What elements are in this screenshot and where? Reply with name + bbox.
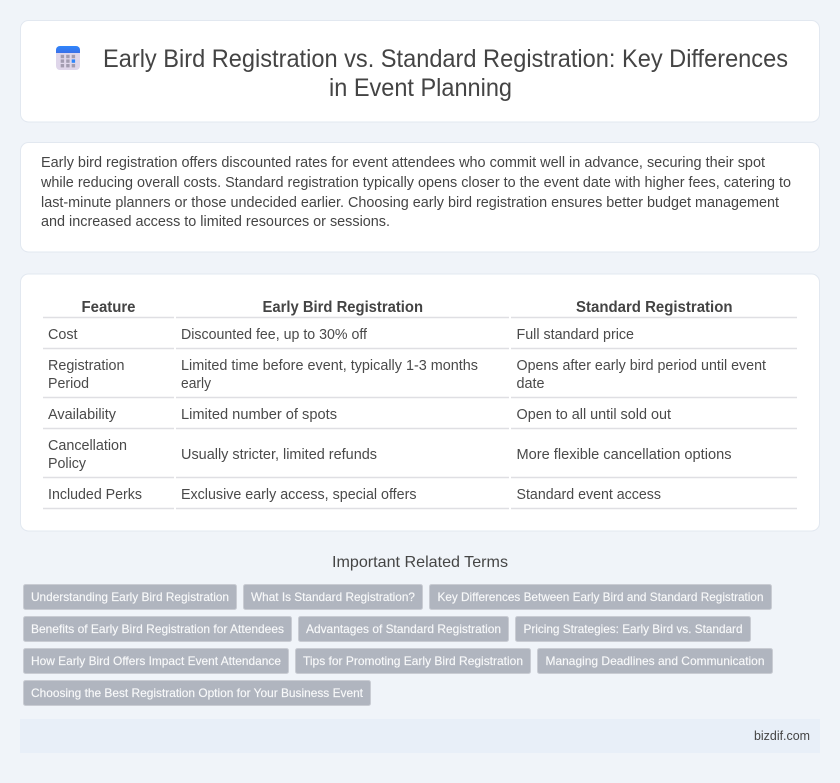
table header row: Early Bird Registration: [262, 299, 423, 316]
tag: [298, 616, 508, 642]
text block: introduction paragraph: [40, 155, 791, 230]
tag: Benefits of Early Bird Registration for Attendees: [31, 622, 284, 636]
tag: [24, 616, 292, 642]
table row: availability: Limited number of spots: [181, 407, 337, 423]
table row: cancellation policy: Cancellation: [48, 438, 127, 454]
tag: [244, 584, 422, 610]
text block: introduction paragraph: and increased access to limited resources or sessions.: [41, 214, 390, 230]
title: [103, 45, 788, 102]
table row: registration period: date: [516, 376, 544, 392]
title: Early Bird Registration vs. Standard Registration: Key Differences: [103, 45, 788, 73]
tag: [24, 648, 288, 674]
tag: How Early Bird Offers Impact Event Attendance: [31, 654, 281, 668]
text block: introduction paragraph: Early bird registration offers discounted rates for event attendees who commit well in advance, securing their spot: [41, 155, 765, 171]
tag: Managing Deadlines and Communication: [546, 654, 764, 668]
tag: [430, 584, 772, 610]
panel: introduction: [20, 142, 820, 252]
tag: Key Differences Between Early Bird and Standard Registration: [438, 590, 764, 604]
table header row: [82, 299, 732, 316]
text block: introduction paragraph: while reducing overall costs. Standard registration typically opens closer to the event date with higher fees, catering to: [40, 175, 791, 191]
tag: [296, 648, 530, 674]
table row: registration period: Limited time before event, typically 1-3 months: [181, 358, 478, 374]
table row: cancellation policy: More flexible cancellation options: [516, 447, 732, 463]
table row: cost: [48, 327, 634, 343]
table row: included perks: Standard event access: [516, 487, 661, 503]
table row: included perks: Included Perks: [48, 487, 142, 503]
panel: comparison table: [20, 274, 820, 531]
tag: Understanding Early Bird Registration: [31, 590, 229, 604]
tag: Advantages of Standard Registration: [306, 622, 501, 636]
table row: cost: Full standard price: [516, 327, 634, 343]
tag: [538, 648, 772, 674]
table row: availability: Open to all until sold out: [516, 407, 671, 423]
table row: registration period: [48, 358, 766, 392]
panel: header: [20, 20, 820, 122]
table header row: Feature: [82, 299, 136, 316]
footer: [20, 719, 820, 753]
table row: cancellation policy: Policy: [48, 456, 87, 472]
tag: [24, 680, 370, 706]
table row: cost: Cost: [48, 327, 78, 343]
tag: Pricing Strategies: Early Bird vs. Standard: [524, 622, 742, 636]
table row: availability: Availability: [48, 407, 117, 423]
table row: registration period: Period: [48, 376, 89, 392]
tag: Tips for Promoting Early Bird Registration: [303, 654, 523, 668]
table row: included perks: Exclusive early access, special offers: [181, 487, 416, 503]
tag: [516, 616, 750, 642]
title: in Event Planning: [329, 74, 512, 102]
table row: cost: Discounted fee, up to 30% off: [181, 327, 368, 343]
table row: availability: [48, 407, 671, 423]
related terms tags: [24, 584, 772, 706]
tag: Choosing the Best Registration Option for Your Business Event: [31, 686, 364, 700]
heading: important related terms: Important Related Terms: [332, 554, 508, 571]
table row: registration period: Opens after early bird period until event: [516, 358, 766, 374]
tag: What Is Standard Registration?: [251, 590, 415, 604]
table row: included perks: [48, 487, 661, 503]
text block: introduction paragraph: last-minute planners or those undecided earlier. Choosing early bird registration ensures better budget management: [41, 195, 779, 211]
table row: cancellation policy: [48, 438, 732, 472]
footer: bizdif.com: [754, 729, 810, 743]
table row: registration period: Registration: [48, 358, 124, 374]
tag: [24, 584, 236, 610]
table header row: Standard Registration: [576, 299, 732, 316]
icon: calendar: [56, 46, 80, 70]
table row: registration period: early: [181, 376, 212, 392]
table row: cancellation policy: Usually stricter, limited refunds: [181, 447, 377, 463]
